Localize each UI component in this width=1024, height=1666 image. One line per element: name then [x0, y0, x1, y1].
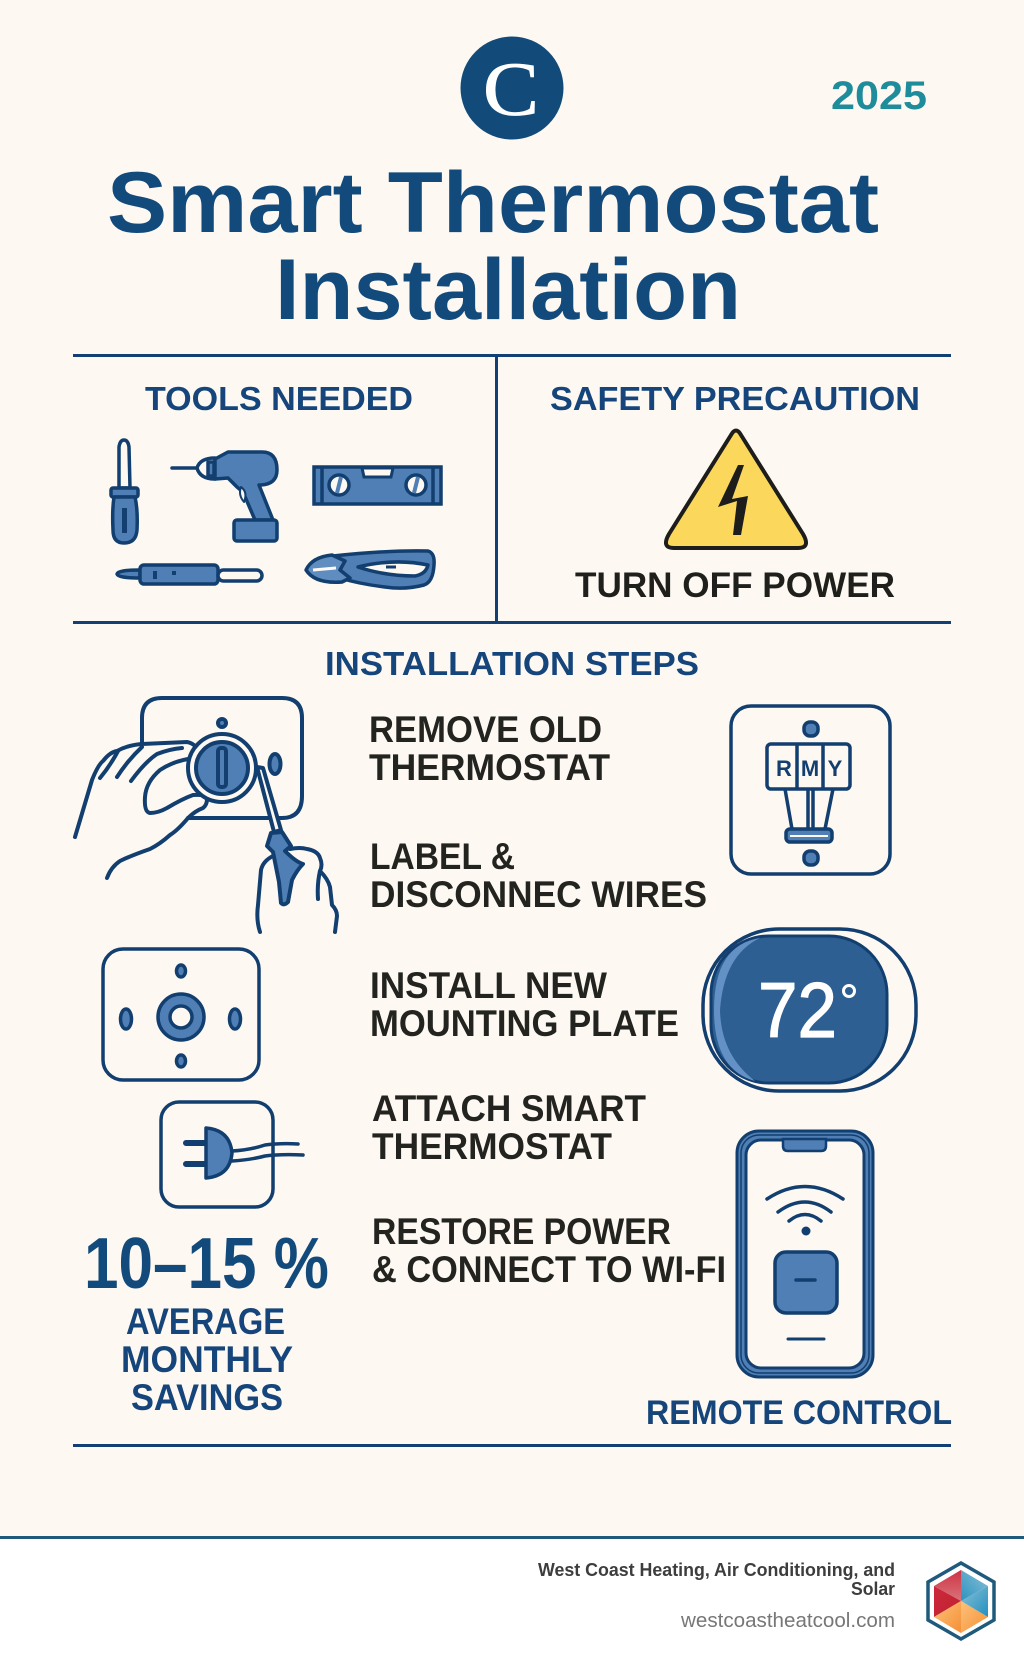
panel: tools needed: [111, 380, 441, 588]
label: remote control: REMOTE CONTROL: [646, 1394, 952, 1432]
step 3: INSTALL NEW: [370, 965, 607, 1006]
icon: high voltage warning: [666, 430, 806, 548]
step 3: [370, 965, 679, 1044]
step 1: REMOVE OLD: [369, 709, 602, 750]
steps list: [369, 709, 726, 1290]
year label: 2025: [831, 74, 927, 118]
step 3: MOUNTING PLATE: [370, 1003, 679, 1044]
stat label: AVERAGE: [126, 1301, 285, 1342]
heading: tools needed: TOOLS NEEDED: [145, 380, 413, 417]
step 5: [372, 1211, 726, 1290]
step 4: [372, 1088, 646, 1167]
step 5: RESTORE POWER: [372, 1211, 671, 1252]
step 2: [370, 836, 707, 915]
icon: mounting plate: [103, 949, 259, 1080]
company name: West Coast Heating, Air Conditioning, and: [538, 1559, 895, 1580]
heading: installation steps: INSTALLATION STEPS: [325, 645, 699, 682]
panel: safety precaution: [550, 380, 920, 605]
step 4: THERMOSTAT: [372, 1126, 612, 1167]
icon: cordless drill: [172, 452, 277, 541]
icon: tester screwdriver: [117, 565, 262, 584]
logo: company C badge: [460, 36, 564, 140]
step 5: & CONNECT TO WI-FI: [372, 1249, 726, 1290]
website: westcoastheatcool.com: [680, 1610, 895, 1632]
stat label: MONTHLY: [121, 1339, 293, 1380]
title: Smart Thermostat: [107, 155, 879, 251]
company name: Solar: [851, 1578, 895, 1599]
icon: wire terminal box: M: [801, 756, 819, 781]
icon: hands removing old thermostat: [75, 698, 337, 932]
company logo hexagon: [928, 1563, 994, 1639]
step 2: DISCONNEC WIRES: [370, 874, 707, 915]
step 1: [369, 709, 610, 788]
footer: [0, 1536, 1024, 1666]
step 2: LABEL &: [370, 836, 515, 877]
icon: smart thermostat showing 72 degrees: [703, 929, 916, 1091]
step 4: ATTACH SMART: [372, 1088, 646, 1129]
stat label: SAVINGS: [131, 1377, 283, 1418]
step 1: THERMOSTAT: [369, 747, 610, 788]
stat: savings: [84, 1224, 329, 1418]
icon: smart thermostat showing 72 degrees: 72: [758, 966, 837, 1054]
heading: safety precaution: SAFETY PRECAUTION: [550, 380, 920, 417]
stat label: [121, 1301, 293, 1418]
icon: wire terminal box: Y: [828, 756, 843, 781]
icon: wire terminal box: R: [776, 756, 792, 781]
icon: smartphone with wi-fi: [737, 1131, 873, 1377]
icon: pliers: [306, 551, 434, 588]
logo: company C badge: C: [483, 48, 539, 132]
icon: wire terminal box: [731, 706, 890, 874]
stat value: 10–15 %: [84, 1224, 329, 1304]
icon: spirit level: [314, 467, 441, 504]
company name: [538, 1559, 895, 1599]
title: Installation: [275, 242, 741, 338]
icon: wall plug: [161, 1102, 303, 1207]
label: turn off power: TURN OFF POWER: [575, 566, 895, 605]
title: [107, 155, 879, 338]
icon: screwdriver: [111, 440, 138, 543]
